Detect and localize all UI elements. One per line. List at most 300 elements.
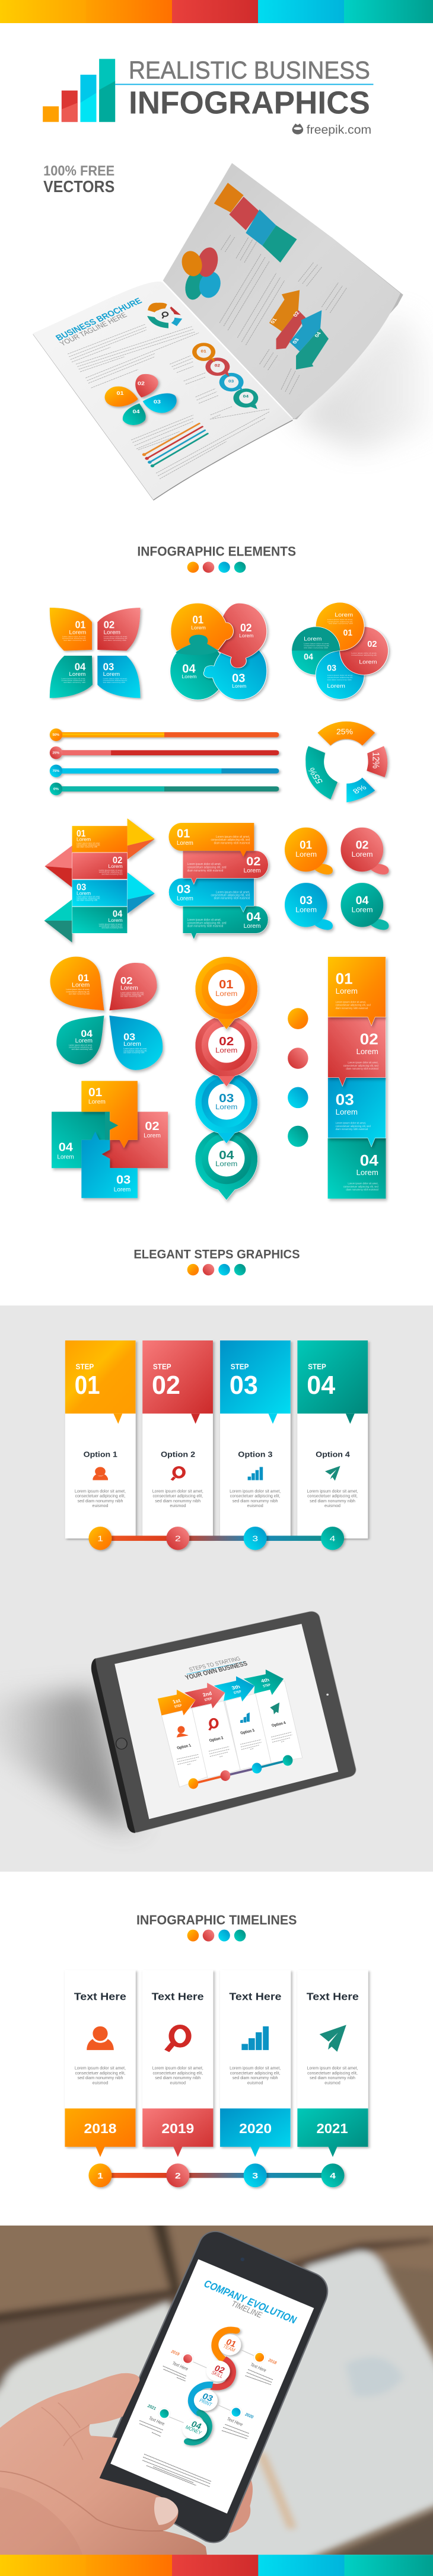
leaf diagram — [50, 608, 141, 698]
arrow card 02: Lorem ipsum dolor sit amet, — [99, 869, 123, 872]
tablet screen heading: YOUR OWN BUSINESS — [184, 1659, 249, 1681]
tagline: 100% free vectors: VECTORS — [43, 177, 114, 196]
years timeline — [88, 2163, 345, 2187]
column block 04 — [328, 1138, 386, 1199]
bubbles — [285, 828, 389, 930]
step card 4: euismod — [324, 1503, 340, 1508]
square puzzle — [52, 1081, 168, 1198]
tablet options text — [176, 1720, 286, 1750]
step 01 team — [218, 2334, 241, 2355]
tablet screen heading: STEPS TO STARTING — [188, 1656, 241, 1673]
venn diagram: Lorem — [327, 684, 345, 689]
step timeline — [88, 1527, 344, 1550]
teardrop 04: 04 — [81, 1029, 93, 1039]
arrow card 01: consectetuer adipiscing elit, — [77, 844, 100, 846]
right page arrows: 02 — [291, 310, 301, 318]
step 02 skill: SKILL — [211, 2369, 224, 2379]
arrow card 04: 04 — [113, 909, 123, 920]
arrow card 03 — [72, 880, 128, 906]
timeline card 2021 — [297, 1970, 368, 2157]
brochure right page — [163, 163, 403, 419]
leaf 02: Lorem ipsum dolor sit amet, — [104, 636, 128, 637]
progress bars — [50, 729, 279, 795]
teardrop 02: Lorem — [120, 985, 138, 991]
ribbon 01: 01 — [177, 827, 190, 841]
timeline card 2018: sed diam nonummy nibh — [78, 2075, 123, 2080]
tablet arrow 2nd: 2nd — [202, 1691, 213, 1698]
brochure title: BUSINESS BROCHURE — [54, 296, 144, 343]
bubble 04: Lorem — [352, 906, 373, 914]
step card 3: consectetuer adipiscing elit, — [230, 1493, 281, 1498]
year labels: 2019 — [170, 2349, 180, 2357]
pin 02: Lorem — [215, 1046, 237, 1054]
arrow card 04 — [72, 906, 128, 933]
bubble 03 — [285, 883, 333, 930]
column block 03: consectetuer adipiscing elit, sed — [336, 1125, 371, 1128]
leaf 03: 03 — [103, 662, 114, 672]
pin 01 — [195, 957, 257, 1029]
timeline card 2021: euismod — [324, 2080, 340, 2085]
venn diagram: Lorem ipsum dolor sit amet, — [351, 652, 377, 654]
teardrop 03: Lorem — [123, 1041, 141, 1047]
pin 03 — [195, 1072, 257, 1143]
teardrop 01: consectetuer adipiscing elit, — [66, 991, 90, 993]
timeline card 2021: Lorem ipsum dolor sit amet, — [307, 2066, 358, 2070]
column block 04: Lorem — [356, 1168, 378, 1177]
ribbon 01: diam nonummy nibh euismod — [214, 841, 250, 845]
puzzle diagram — [170, 603, 267, 700]
tablet timeline — [189, 1755, 292, 1789]
timeline card 2018: consectetuer adipiscing elit, — [75, 2070, 125, 2076]
brochure progress bars — [142, 423, 208, 467]
right page arrows: 01 — [269, 317, 278, 324]
ribbon 03: 03 — [177, 883, 190, 896]
panel: infographic elements rows 2 and 3 — [44, 818, 389, 1275]
brochure left page — [33, 282, 293, 500]
pin 03: Lorem — [215, 1103, 237, 1111]
venn diagram: Lorem — [359, 659, 377, 665]
pin 01: 01 — [219, 978, 234, 991]
step card 4: Lorem ipsum dolor sit amet, — [307, 1489, 358, 1493]
teardrop 02: sed diam nonummy nibh — [120, 995, 141, 997]
bar 50%: 50% — [52, 734, 60, 737]
step card 1: 01 — [75, 1371, 100, 1400]
venn diagram: Lorem ipsum dolor sit amet, — [327, 619, 353, 621]
arrow card 03: 03 — [77, 882, 86, 893]
pin 01: Lorem — [215, 989, 237, 998]
teardrop 02: Lorem ipsum dolor sit amet, — [120, 991, 144, 994]
teardrop 03: consectetuer adipiscing elit, — [123, 1049, 147, 1052]
arrow card 03: consectetuer adipiscing elit, — [77, 897, 100, 900]
arrow card 04: Lorem — [108, 917, 123, 923]
text here labels: Text Here — [171, 2360, 189, 2371]
step card 3: Lorem ipsum dolor sit amet, — [230, 1489, 281, 1493]
arrow 04 — [44, 899, 72, 943]
leaf 02: 02 — [104, 620, 114, 630]
timeline card 2018: euismod — [93, 2080, 108, 2085]
bar 75% — [50, 765, 279, 777]
column block 02: Lorem — [356, 1047, 378, 1056]
years timeline: 3 — [252, 2172, 258, 2181]
tablet arrow 1st: 1st — [172, 1698, 182, 1705]
puzzle diagram: Lorem — [182, 674, 196, 679]
leaf 03: consectetuer adipiscing elit, — [103, 679, 128, 681]
step 03 print — [194, 2390, 218, 2411]
bubble 04 — [341, 883, 389, 930]
right page arrows: 04 — [313, 331, 323, 339]
tablet arrow 2nd — [184, 1683, 225, 1709]
teardrop clover — [50, 957, 163, 1070]
step card 3 — [220, 1340, 291, 1538]
bubble 02: 02 — [356, 838, 369, 851]
step card 2: Option 2 — [161, 1450, 195, 1459]
puzzle diagram: 01 — [192, 613, 203, 626]
pin 02: 02 — [219, 1035, 234, 1048]
tablet arrow 3rd — [214, 1676, 254, 1702]
teardrop 02: consectetuer adipiscing elit, — [120, 993, 144, 995]
venn diagram: sed diam nonummy nibh — [304, 647, 328, 649]
timeline card 2019: Lorem ipsum dolor sit amet, — [152, 2066, 203, 2070]
step 04 money: 04 — [189, 2419, 203, 2431]
side nodes — [158, 2350, 266, 2422]
bar 0%: 0% — [53, 788, 59, 791]
square orange 01: Lorem — [88, 1099, 106, 1106]
step card 4: consectetuer adipiscing elit, — [307, 1493, 358, 1498]
step card 1: sed diam nonummy nibh — [78, 1498, 123, 1504]
tablet shadow — [0, 1688, 130, 1836]
ribbon 01 — [168, 823, 254, 857]
donut chart: 55% — [306, 767, 325, 785]
year labels: 2021 — [147, 2403, 157, 2411]
timeline card 2021: sed diam nonummy nibh — [310, 2075, 355, 2080]
column block 03: Lorem ipsum dolor sit amet, — [336, 1122, 366, 1125]
arrow card 02: sed diam nonummy nibh — [101, 873, 123, 875]
column block 01: diam nonummy nibh euismod — [336, 1007, 368, 1010]
timeline card 2018: Lorem ipsum dolor sit amet, — [75, 2066, 126, 2070]
panel: infographic elements row 1 — [50, 602, 389, 802]
freepik logo — [292, 123, 371, 136]
heading dots — [187, 1264, 246, 1275]
step card 1: euismod — [92, 1503, 109, 1508]
timeline card 2018 — [65, 1970, 136, 2157]
arrow card 04: Lorem ipsum dolor sit amet, — [99, 923, 123, 925]
timeline card 2021: 2021 — [317, 2120, 348, 2136]
right page venn — [180, 247, 222, 301]
pin 03: 03 — [219, 1091, 234, 1105]
arrow card 01: sed diam nonummy nibh — [77, 845, 97, 848]
icon: paper plane — [320, 2025, 346, 2052]
timeline subtitle: TIMELINE — [230, 2300, 264, 2320]
brochure pin chain: 02 — [215, 363, 220, 368]
logo and title — [43, 56, 373, 196]
year labels — [147, 2349, 278, 2419]
column block 03 — [328, 1078, 386, 1147]
step 03 print: PRINT — [198, 2397, 214, 2408]
text here labels — [148, 2360, 268, 2427]
fingers behind phone — [218, 2473, 253, 2533]
phone body — [96, 2232, 327, 2542]
square blue 03: 03 — [116, 1173, 130, 1187]
step card 4: STEP — [308, 1363, 326, 1371]
step card 1: Lorem ipsum dolor sit amet, — [75, 1489, 126, 1493]
venn diagram: Lorem ipsum dolor sit amet, — [327, 675, 353, 676]
timeline card 2020: consectetuer adipiscing elit, — [230, 2070, 281, 2076]
arrow 01 — [128, 818, 155, 860]
leaf 01: sed diam nonummy nibh — [63, 640, 86, 641]
heading dots — [187, 1930, 246, 1942]
donut chart — [305, 722, 387, 802]
timeline card 2019: consectetuer adipiscing elit, — [152, 2070, 203, 2076]
column block 04: diam nonummy nibh euismod — [346, 1188, 378, 1191]
bubble 02: Lorem — [352, 851, 373, 858]
timeline card 2018: 2018 — [84, 2120, 116, 2136]
heading dots — [187, 561, 246, 573]
teardrop 01: Lorem ipsum dolor sit amet, — [66, 988, 90, 991]
teardrop 01: Lorem — [72, 982, 90, 988]
bubble 03: Lorem — [295, 906, 317, 914]
arrow card 03: Lorem — [77, 890, 91, 896]
column block 04: consectetuer adipiscing elit, sed — [343, 1185, 378, 1188]
step card 3: euismod — [247, 1503, 263, 1508]
square red 02: 02 — [145, 1119, 160, 1133]
puzzle diagram: Lorem — [232, 684, 246, 689]
tablet options text: Option 3 — [240, 1728, 256, 1735]
column block 01: consectetuer adipiscing elit, sed — [336, 1004, 371, 1007]
step timeline: 1 — [97, 1535, 103, 1543]
pin 04: Lorem — [215, 1160, 237, 1168]
ribbon 02: Lorem ipsum dolor sit amet, — [187, 863, 221, 866]
teardrop 03: Lorem ipsum dolor sit amet, — [123, 1048, 147, 1050]
timeline card 2018: Text Here — [74, 1991, 126, 2003]
puzzle diagram: 04 — [182, 662, 196, 675]
donut chart: 25% — [336, 728, 353, 736]
heading: infographic elements: INFOGRAPHIC ELEMENTS — [137, 545, 296, 559]
years timeline: 4 — [330, 2172, 336, 2181]
tablet icons — [177, 1703, 279, 1738]
arrow card 01 — [72, 826, 128, 853]
column block 02 — [328, 1017, 386, 1086]
brochure tagline: YOUR TAGLINE HERE — [58, 311, 129, 347]
column block 04: 04 — [360, 1153, 378, 1169]
step card 2 — [142, 1340, 213, 1538]
timeline card 2020: sed diam nonummy nibh — [233, 2075, 278, 2080]
ribbon 02: Lorem — [244, 867, 260, 874]
step 04 money: MONEY — [184, 2424, 203, 2435]
tablet home button — [116, 1738, 127, 1749]
timeline card 2021: consectetuer adipiscing elit, — [307, 2070, 358, 2076]
arrow 03 — [128, 872, 155, 914]
tablet camera — [326, 1694, 329, 1696]
tablet arrow 4th: STEP — [262, 1683, 272, 1688]
donut chart: 8% — [351, 784, 368, 795]
teardrop 03: sed diam nonummy nibh — [123, 1051, 145, 1054]
column block 02: consectetuer adipiscing elit, sed — [343, 1064, 378, 1067]
brochure shadow — [295, 307, 425, 453]
puzzle diagram: 03 — [232, 672, 245, 685]
timeline card 2019: sed diam nonummy nibh — [155, 2075, 200, 2080]
step card 4: 04 — [307, 1371, 335, 1400]
step 01 team: 01 — [224, 2338, 238, 2349]
square teal 04 — [52, 1112, 118, 1168]
step card 1: STEP — [76, 1363, 94, 1371]
leaf 04: consectetuer adipiscing elit, — [61, 679, 85, 681]
column block 03: 03 — [336, 1092, 354, 1109]
timeline card 2020 — [220, 1970, 291, 2157]
icon: paper plane — [325, 1466, 340, 1481]
venn diagram: consectetuer adipiscing elit, — [327, 621, 353, 623]
column block 01: 01 — [336, 971, 353, 988]
ribbon 04: 04 — [246, 910, 261, 924]
ribbon 03: Lorem ipsum dolor sit amet, — [216, 890, 250, 895]
arrow card 04: consectetuer adipiscing elit, — [99, 925, 123, 927]
arrow card 01: Lorem — [77, 836, 91, 842]
leaf 01: Lorem — [69, 630, 86, 636]
step card 1: consectetuer adipiscing elit, — [75, 1493, 125, 1498]
column block 02: Lorem ipsum dolor sit amet, — [348, 1061, 378, 1064]
tablet left edge — [91, 1658, 135, 1833]
timeline card 2019 — [142, 1970, 213, 2157]
arrow card 03: Lorem ipsum dolor sit amet, — [77, 895, 100, 898]
tablet arrow 3rd: 3th — [231, 1684, 241, 1691]
venn diagram: 02 — [367, 639, 377, 649]
bubble 04: 04 — [356, 893, 369, 906]
thumbnail — [154, 2497, 178, 2525]
square teal 04: 04 — [59, 1141, 73, 1154]
venn diagram: 04 — [304, 652, 313, 662]
pin 02 — [195, 1016, 257, 1086]
ribbon 02: consectetuer adipiscing elit, sed — [187, 866, 227, 870]
column block 03: Lorem — [336, 1107, 358, 1116]
icon: bars — [248, 1467, 263, 1480]
brochure petals: 03 — [154, 399, 161, 405]
icon: person — [87, 2026, 114, 2050]
arrow 02 — [44, 845, 72, 888]
brochure mockup — [33, 163, 425, 573]
step card 4 — [297, 1340, 368, 1538]
teardrop 01: sed diam nonummy nibh — [69, 992, 90, 995]
venn diagram: Lorem ipsum dolor sit amet, — [304, 643, 329, 644]
square orange 01 — [81, 1081, 138, 1148]
bubble 01: 01 — [300, 838, 312, 851]
header colour bar — [0, 0, 433, 23]
venn diagram: 01 — [343, 628, 352, 637]
square red 02 — [101, 1112, 168, 1168]
teardrop 04 — [56, 1016, 104, 1064]
title divider — [115, 84, 373, 85]
tablet arrow 1st: STEP — [174, 1704, 183, 1709]
step timeline: 4 — [330, 1535, 336, 1543]
ribbon 04: Lorem ipsum dolor sit amet, — [187, 918, 221, 922]
teardrop 02: 02 — [120, 976, 133, 987]
puzzle diagram: Lorem — [239, 633, 253, 639]
tablet arrow 4th: 4th — [260, 1677, 270, 1684]
brochure petals: 04 — [132, 409, 140, 415]
heading: elegant steps graphics: ELEGANT STEPS GRAPHICS — [133, 1247, 300, 1262]
arrow card 02: consectetuer adipiscing elit, — [99, 871, 123, 873]
timeline card 2020: Text Here — [229, 1991, 281, 2003]
leaf 03: Lorem — [103, 672, 120, 677]
teardrop 04: consectetuer adipiscing elit, — [69, 1046, 93, 1049]
timeline card 2020: Lorem ipsum dolor sit amet, — [230, 2066, 281, 2070]
footer colour bar — [0, 2555, 433, 2576]
teardrop 01: 01 — [78, 973, 89, 984]
column block 02: diam nonummy nibh euismod — [346, 1067, 378, 1070]
step card 1: Option 1 — [84, 1450, 117, 1459]
ribbon 04: Lorem — [244, 923, 260, 930]
text here labels: Text Here — [226, 2416, 244, 2427]
arrow card 01: 01 — [77, 828, 85, 839]
timeline card 2019: Text Here — [152, 1991, 204, 2003]
venn diagram: consectetuer adipiscing elit, — [327, 676, 353, 678]
tablet arrow 4th — [244, 1670, 284, 1695]
venn diagram — [292, 602, 389, 699]
icon: magnifier — [172, 1467, 184, 1480]
tablet screen heading — [184, 1656, 249, 1681]
ribbon 03: diam nonummy nibh euismod — [214, 896, 250, 901]
phone screen — [110, 2259, 314, 2514]
arrow card 04: sed diam nonummy nibh — [101, 927, 123, 929]
step card 4: Option 4 — [316, 1450, 350, 1459]
step card 2: sed diam nonummy nibh — [155, 1498, 200, 1504]
step card 2: euismod — [170, 1503, 186, 1508]
timeline card 2019: 2019 — [161, 2120, 194, 2136]
teardrop 03 — [109, 1016, 163, 1070]
ribbon 04: diam nonummy nibh euismod — [187, 924, 224, 928]
brochure petals: 02 — [138, 381, 145, 387]
icon: bar chart logo — [43, 59, 115, 122]
phone camera — [241, 2258, 244, 2261]
teardrop 02 — [109, 963, 157, 1010]
timeline card 2020: euismod — [247, 2080, 263, 2085]
brochure pin chain: 03 — [228, 379, 234, 384]
freepik logo: freepik.com — [307, 123, 371, 136]
ribbon 02: diam nonummy nibh euismod — [187, 869, 224, 873]
arrow card 03: sed diam nonummy nibh — [77, 899, 97, 902]
stacked column — [328, 957, 386, 1199]
leaf 02: sed diam nonummy nibh — [104, 640, 126, 641]
leaf 03: Lorem ipsum dolor sit amet, — [103, 678, 128, 679]
venn diagram: sed diam nonummy nibh — [327, 679, 352, 681]
tagline: 100% free vectors: 100% FREE — [43, 163, 114, 179]
bubble 01 — [285, 828, 333, 874]
right page text lines — [219, 235, 346, 394]
venn diagram: sed diam nonummy nibh — [329, 623, 353, 624]
timeline card 2020: 2020 — [239, 2120, 272, 2136]
teardrop 03: 03 — [123, 1032, 135, 1043]
icon: magnifier — [167, 2027, 189, 2051]
donut chart: 12% — [371, 752, 381, 768]
heading: infographic timelines: INFOGRAPHIC TIMELINES — [136, 1913, 297, 1927]
bar 0% — [50, 783, 279, 795]
years timeline: 2 — [175, 2172, 181, 2181]
blurred desk background — [0, 2226, 433, 2555]
square teal 04: Lorem — [57, 1154, 74, 1161]
speech ribbon stack — [168, 823, 268, 939]
square blue 03: Lorem — [114, 1186, 130, 1193]
brochure pin chain — [192, 343, 258, 409]
arrow card 02 — [72, 853, 128, 879]
panel: infographic timelines — [65, 1913, 368, 2187]
step card 3: STEP — [231, 1363, 249, 1371]
leaf 02: consectetuer adipiscing elit, — [104, 637, 128, 639]
ribbon 04 — [183, 906, 268, 939]
icon: bars — [241, 2026, 269, 2050]
ribbon 03 — [168, 878, 254, 912]
column block 02: 02 — [360, 1032, 378, 1048]
right page puzzle blocks — [214, 183, 297, 263]
brochure pin chain: 04 — [243, 394, 249, 398]
step card 3: 03 — [230, 1371, 258, 1400]
